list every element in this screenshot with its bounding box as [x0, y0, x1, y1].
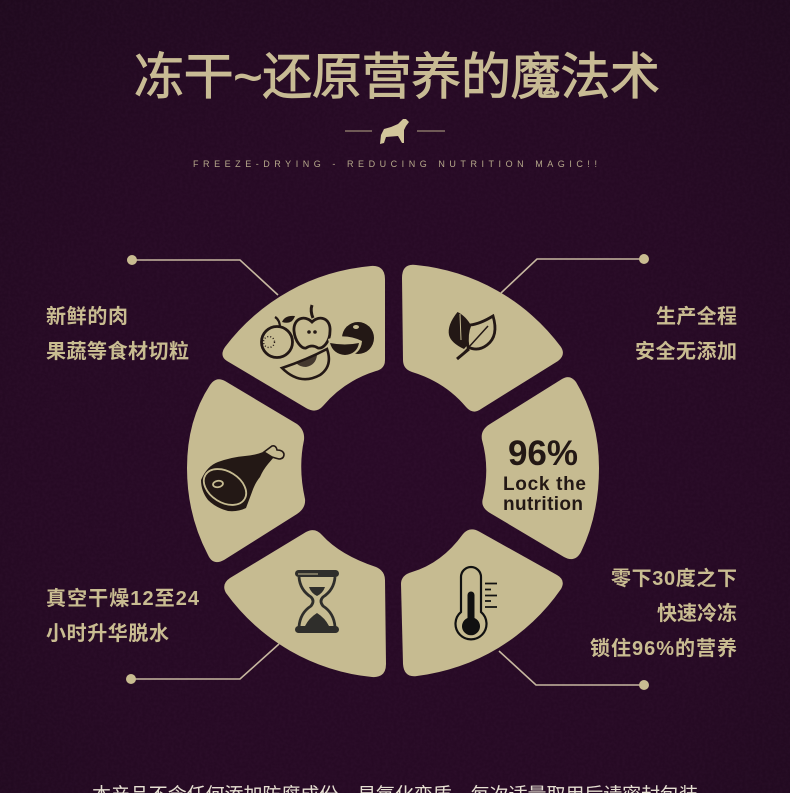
icon: fruits	[262, 305, 374, 379]
text: Lock the nutrition: Lock the	[503, 474, 586, 495]
stat: 96%: 96%	[508, 434, 578, 473]
panel: leaf segment	[402, 265, 563, 412]
text: quick freezing: 零下30度之下	[611, 566, 737, 590]
text: fresh meat, fruit and vegetables: 新鲜的肉	[46, 305, 128, 328]
icon: hourglass	[295, 570, 339, 633]
icon: ham	[197, 446, 284, 512]
text: quick freezing: 快速冷冻	[657, 602, 737, 625]
text: fresh meat, fruit and vegetables	[46, 305, 189, 363]
title: 冻干~还原营养的魔法术	[134, 49, 660, 105]
icon: thermometer	[456, 567, 497, 639]
subtitle: FREEZE-DRYING - REDUCING NUTRITION MAGIC!!	[193, 159, 597, 169]
text: fresh meat, fruit and vegetables: 果蔬等食材切粒	[46, 339, 189, 363]
panel: ham segment	[187, 379, 305, 562]
connector: bottom right	[499, 651, 649, 690]
icon: dog with side rules	[345, 119, 445, 144]
text: Lock the nutrition: nutrition	[503, 494, 583, 515]
connector: bottom left	[126, 644, 279, 684]
panel: 96% segment	[482, 377, 599, 559]
connector: top right	[501, 254, 649, 293]
text: Lock the nutrition	[503, 474, 586, 515]
icon: leaves	[449, 312, 495, 359]
panel: fruit segment	[222, 266, 385, 411]
connector: top left	[127, 255, 278, 295]
panel: hourglass segment	[224, 530, 386, 677]
text: whole-process safety: 生产全程	[656, 304, 737, 328]
text: vacuum drying: 真空干燥12至24	[46, 586, 200, 610]
text: quick freezing	[590, 566, 737, 660]
text: quick freezing: 锁住96%的营养	[590, 636, 737, 660]
text: vacuum drying	[46, 586, 200, 645]
text: vacuum drying: 小时升华脱水	[46, 622, 169, 645]
text: whole-process safety: 安全无添加	[635, 339, 737, 363]
text: whole-process safety	[635, 304, 737, 363]
panel: thermometer segment	[401, 529, 563, 676]
